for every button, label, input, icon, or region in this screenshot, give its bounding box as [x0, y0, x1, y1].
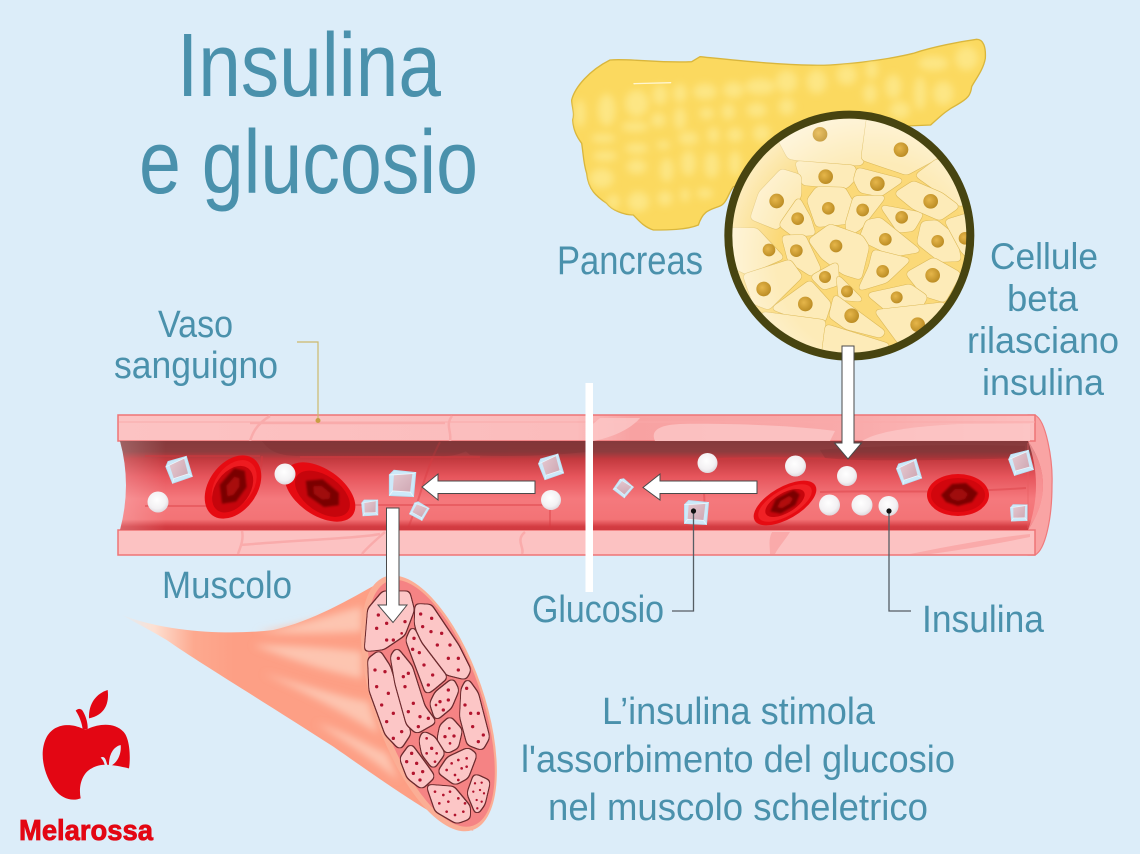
- label: Cellule beta rilasciano insulina: beta: [1007, 278, 1078, 319]
- caption: [521, 691, 955, 829]
- label: Cellule beta rilasciano insulina: rilasciano: [967, 320, 1119, 361]
- illustration: magnified beta cells: [728, 115, 973, 360]
- leader: vaso sanguigno: [297, 342, 320, 423]
- arrow: pancreas to vessel: [834, 346, 862, 459]
- red blood cell: [274, 450, 366, 534]
- white divider: [586, 383, 593, 592]
- arrow: to the left, right half: [643, 474, 757, 500]
- illustration: pancreas: [572, 39, 985, 230]
- arrow: to the left, left half: [422, 474, 535, 500]
- illustration: muscle: [120, 559, 525, 848]
- insulin spheres: [148, 453, 898, 516]
- caption: l'assorbimento del glucosio: [521, 739, 955, 781]
- label: Vaso sanguigno: Vaso: [158, 304, 233, 346]
- title: [139, 16, 478, 213]
- leader: glucosio: [672, 508, 696, 611]
- caption: nel muscolo scheletrico: [548, 787, 928, 829]
- label: Cellule beta rilasciano insulina: insulina: [982, 362, 1104, 403]
- red blood cell: [927, 474, 989, 516]
- title: Insulina: [177, 16, 442, 116]
- label: Vaso sanguigno: sanguigno: [114, 345, 278, 387]
- glucose cubes: [164, 448, 1035, 525]
- caption: L’insulina stimola: [602, 691, 876, 733]
- label: Cellule beta rilasciano insulina: Cellule: [990, 236, 1098, 277]
- logo: Melarossa: [19, 690, 154, 847]
- label: Insulina: Insulina: [922, 599, 1045, 641]
- arrow: vessel to muscle: [378, 508, 407, 622]
- label: Muscolo: Muscolo: [162, 565, 292, 607]
- logo: Melarossa: Melarossa: [19, 815, 154, 847]
- title: e glucosio: [139, 113, 478, 213]
- red blood cell: [747, 472, 823, 534]
- label: Vaso sanguigno: [114, 304, 278, 387]
- label: Glucosio: Glucosio: [532, 589, 664, 631]
- red blood cell: [193, 445, 273, 529]
- label: Cellule beta rilasciano insulina: [967, 236, 1119, 403]
- icon: apple: [43, 690, 130, 800]
- label: Pancreas: Pancreas: [557, 239, 703, 283]
- blood vessel: [118, 415, 1052, 555]
- leader: insulina: [886, 508, 911, 611]
